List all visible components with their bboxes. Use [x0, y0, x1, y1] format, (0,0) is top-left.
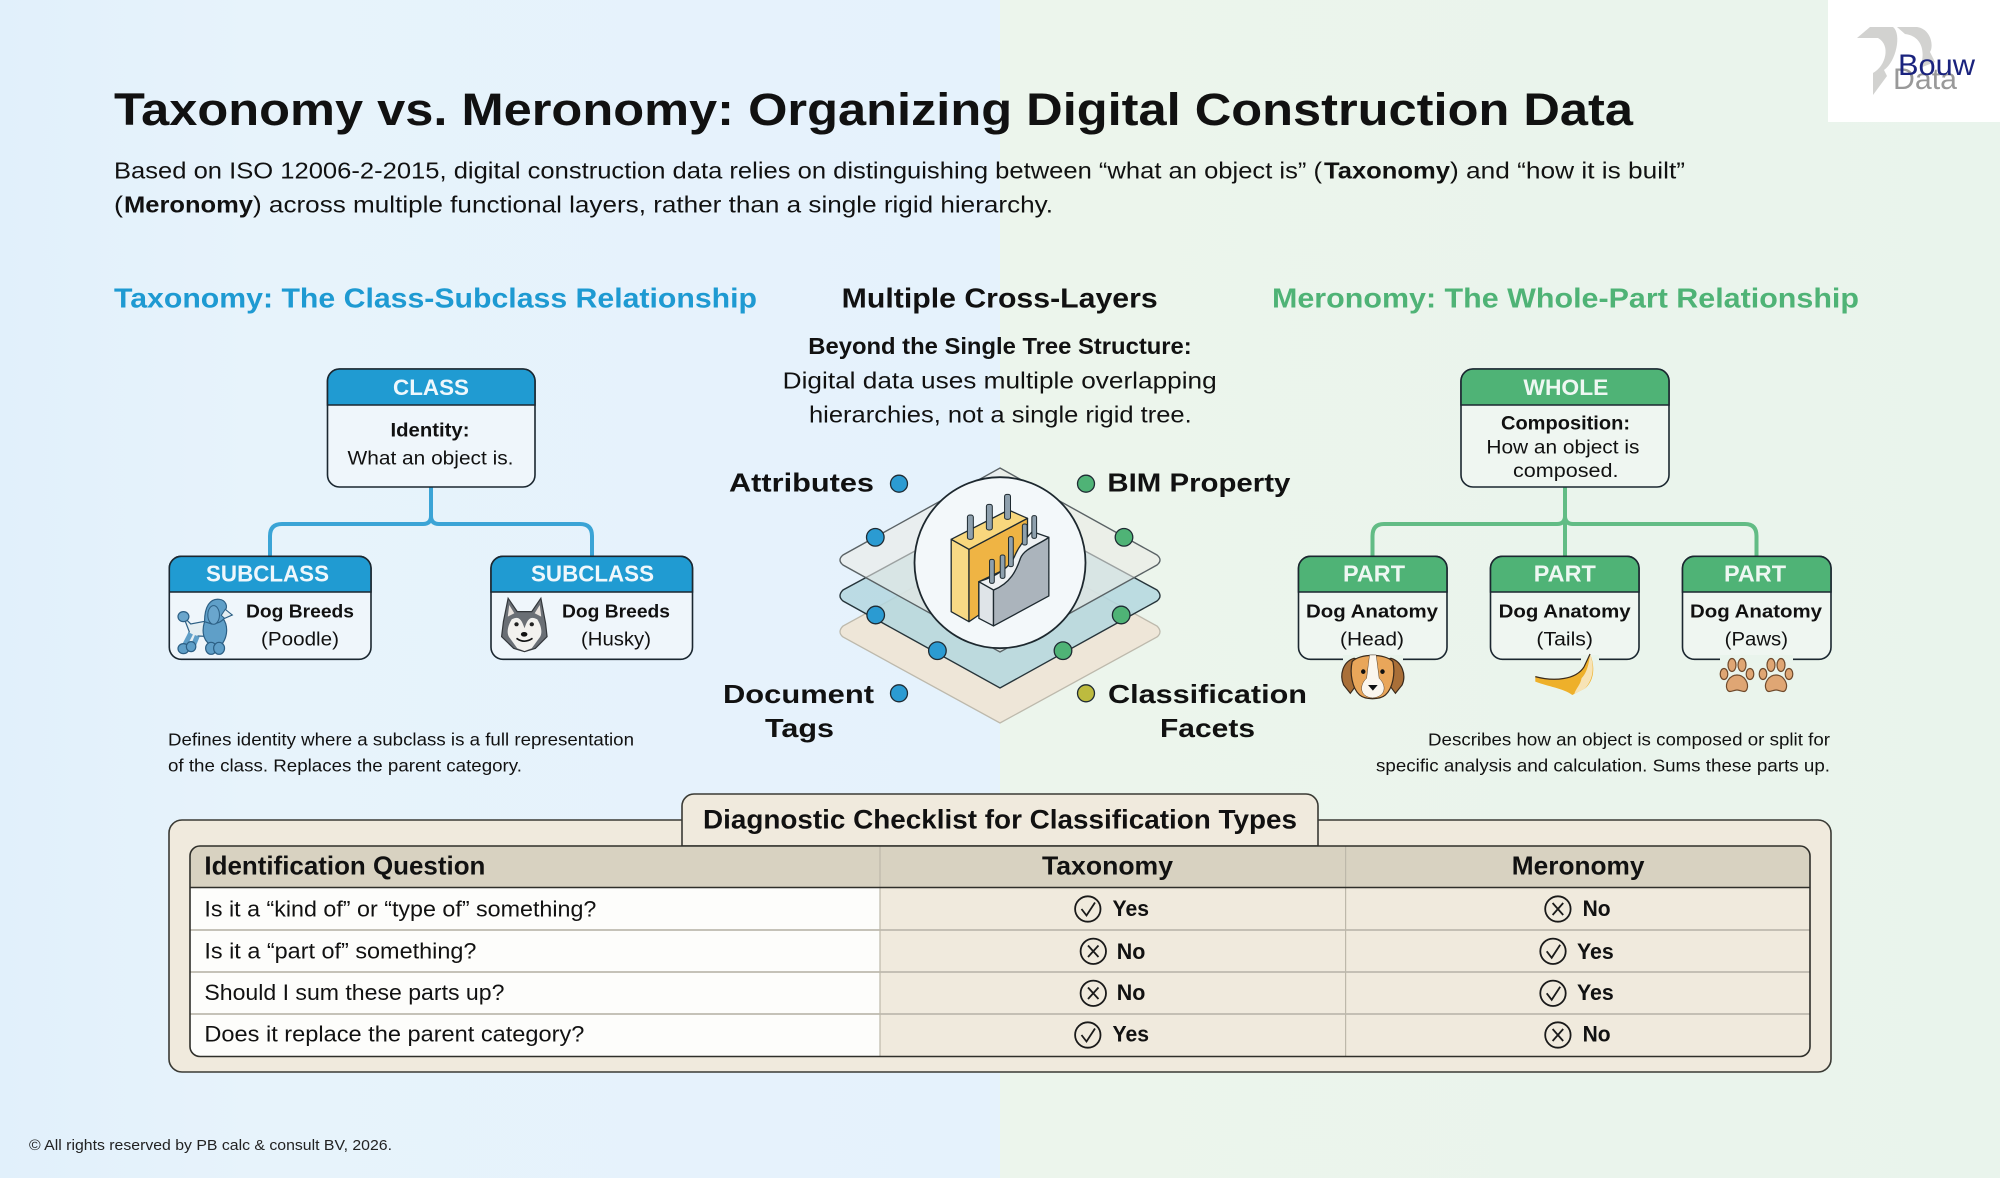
- table header: [204, 850, 1645, 880]
- question column: Is it a “part of” something?: [204, 938, 476, 963]
- label: document tags: Tags: [765, 713, 834, 743]
- intro text: ) across multiple functional layers, rather than a single rigid hierarchy.: [253, 192, 1053, 218]
- box: part paws: [1682, 556, 1831, 692]
- tab: checklist heading: [682, 794, 1318, 846]
- label: attributes: Attributes: [729, 468, 874, 498]
- box: subclass poodle: SUBCLASS: [206, 561, 329, 587]
- taxonomy description: [168, 730, 634, 776]
- title: Taxonomy vs. Meronomy: Organizing Digital Construction Data: [114, 84, 1634, 135]
- table header: Meronomy: [1512, 850, 1645, 880]
- icon: wall: [951, 494, 1049, 626]
- table header: Taxonomy: [1042, 850, 1174, 880]
- center description: Digital data uses multiple overlapping: [783, 367, 1217, 393]
- layer: middle: [840, 505, 1160, 688]
- meronomy answers: [1540, 896, 1614, 1048]
- question column: Should I sum these parts up?: [204, 980, 504, 1005]
- box: class: [328, 369, 535, 487]
- taxonomy description: of the class. Replaces the parent category.: [168, 756, 522, 776]
- intro text: Meronomy: [124, 192, 253, 218]
- meronomy description: specific analysis and calculation. Sums these parts up.: [1376, 756, 1830, 776]
- question column: Does it replace the parent category?: [204, 1022, 584, 1047]
- box: whole: composed.: [1513, 461, 1618, 482]
- question column: Is it a “kind of” or “type of” something?: [204, 897, 596, 922]
- box: whole: Composition:: [1501, 413, 1630, 434]
- taxonomy description: Defines identity where a subclass is a full representation: [168, 730, 634, 750]
- label: classification facets: [1078, 679, 1307, 743]
- question column: [204, 897, 596, 1047]
- logo: [1828, 0, 2000, 122]
- center description: hierarchies, not a single rigid tree.: [809, 402, 1192, 428]
- intro text: [114, 158, 1685, 218]
- meronomy answers: Yes: [1577, 939, 1614, 964]
- taxonomy answers: Yes: [1112, 1022, 1149, 1047]
- taxonomy answers: Yes: [1112, 896, 1149, 921]
- intro text: Based on ISO 12006-2-2015, digital construction data relies on distinguishing between “what an object is” (: [114, 158, 1322, 184]
- meronomy answers: No: [1583, 1022, 1611, 1047]
- box: part tails: PART: [1534, 561, 1596, 587]
- intro text: Taxonomy: [1324, 158, 1450, 184]
- label: document tags: [723, 679, 908, 743]
- table: [190, 846, 1810, 1056]
- layer: bottom: [840, 540, 1160, 723]
- box: part tails: (Tails): [1536, 630, 1593, 651]
- heading: taxonomy: Taxonomy: The Class-Subclass Relationship: [114, 282, 757, 314]
- box: part head: PART: [1343, 561, 1405, 587]
- intro text: ) and “how it is built”: [1450, 158, 1685, 184]
- taxonomy connector: [270, 487, 592, 556]
- center description: [783, 333, 1217, 428]
- box: class: What an object is.: [348, 448, 514, 469]
- background: right green half: [1000, 0, 2000, 1178]
- label: bim property: BIM Property: [1107, 468, 1291, 498]
- box: whole: [1461, 369, 1669, 487]
- box: part paws: Dog Anatomy: [1690, 602, 1822, 622]
- box: subclass husky: [491, 556, 692, 659]
- box: part tails: Dog Anatomy: [1499, 602, 1631, 622]
- taxonomy answers: No: [1117, 980, 1145, 1005]
- box: subclass poodle: Dog Breeds: [246, 602, 354, 622]
- taxonomy answers: No: [1117, 939, 1145, 964]
- meronomy answers: No: [1583, 896, 1611, 921]
- label: classification facets: Facets: [1160, 713, 1255, 743]
- background: left blue half: [0, 0, 1000, 1178]
- label: classification facets: Classification: [1108, 679, 1307, 709]
- box: part head: [1298, 556, 1447, 699]
- box: part head: (Head): [1340, 630, 1404, 651]
- box: part paws: PART: [1724, 561, 1786, 587]
- box: subclass husky: SUBCLASS: [531, 561, 654, 587]
- icon: husky: [502, 598, 547, 652]
- box: part tails: [1490, 556, 1639, 695]
- icon: dog head: [1342, 655, 1404, 699]
- box: subclass husky: Dog Breeds: [562, 602, 670, 622]
- box: whole: How an object is: [1486, 437, 1639, 458]
- heading: cross-layers: Multiple Cross-Layers: [842, 283, 1158, 314]
- box: part head: Dog Anatomy: [1306, 602, 1438, 622]
- icon: paws: [1720, 658, 1793, 692]
- meronomy description: Describes how an object is composed or split for: [1428, 730, 1830, 750]
- icon: tail: [1535, 654, 1593, 695]
- layers diagram: [840, 468, 1160, 723]
- layer: top: [840, 468, 1160, 652]
- box: whole: WHOLE: [1523, 375, 1608, 400]
- logo: Bouw: [1898, 49, 1976, 82]
- label: attributes: [729, 468, 908, 498]
- table header: Identification Question: [204, 850, 485, 880]
- box: subclass husky: (Husky): [581, 630, 651, 651]
- logo: Data: [1893, 63, 1958, 96]
- box: class: Identity:: [390, 421, 470, 442]
- intro text: (: [114, 192, 123, 218]
- center circle: [914, 477, 1086, 648]
- label: document tags: Document: [723, 679, 874, 709]
- panel: diagnostic checklist: [169, 794, 1831, 1072]
- icon: poodle: [178, 599, 232, 654]
- heading: meronomy: Meronomy: The Whole-Part Relationship: [1272, 282, 1859, 314]
- box: subclass poodle: [169, 556, 371, 659]
- footer copyright: © All rights reserved by PB calc & consult BV, 2026.: [29, 1137, 392, 1154]
- tab: checklist heading: Diagnostic Checklist for Classification Types: [703, 804, 1297, 834]
- layer connector dots: [866, 528, 1133, 660]
- meronomy connector: [1372, 487, 1756, 556]
- meronomy description: [1376, 730, 1830, 776]
- box: subclass poodle: (Poodle): [261, 630, 339, 651]
- taxonomy answers: [1075, 896, 1149, 1048]
- box: class: CLASS: [393, 375, 469, 400]
- box: part paws: (Paws): [1725, 630, 1788, 651]
- meronomy answers: Yes: [1577, 980, 1614, 1005]
- center description: Beyond the Single Tree Structure:: [808, 333, 1192, 359]
